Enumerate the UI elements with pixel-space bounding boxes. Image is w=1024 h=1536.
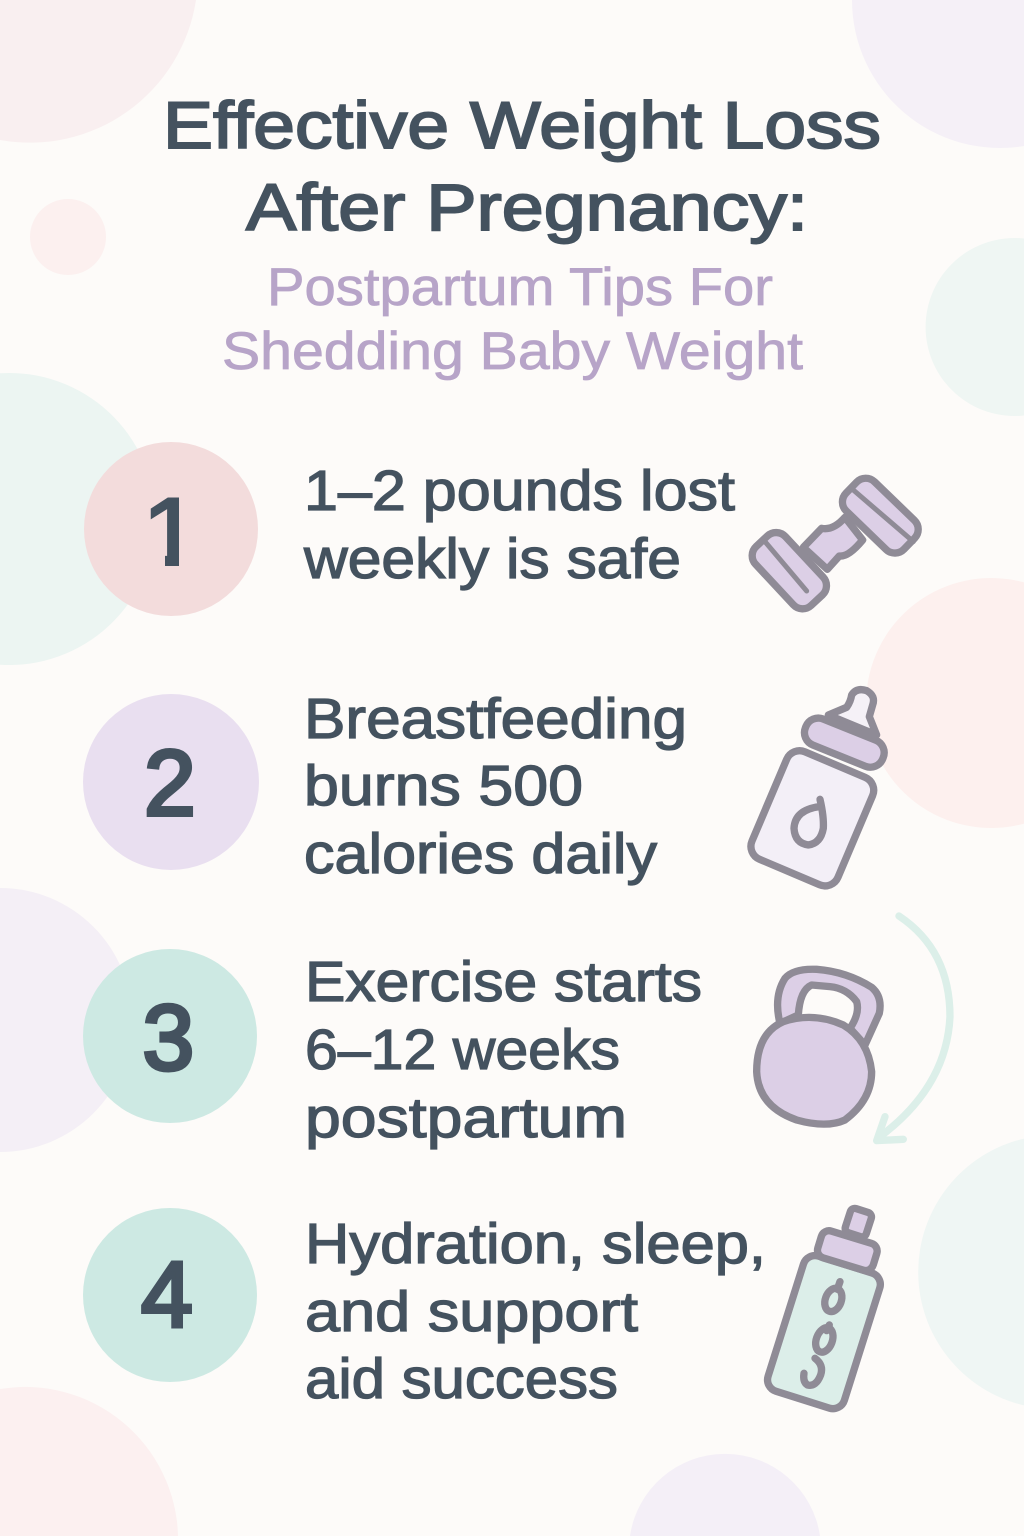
arrow [877, 916, 950, 1141]
icon: water bottle [764, 1207, 883, 1412]
tip 3 text [305, 950, 702, 1150]
number badge 3 [83, 949, 257, 1123]
icon: baby bottle [747, 690, 888, 890]
tip 3 [83, 916, 950, 1150]
number badge 2: 2 [144, 731, 196, 835]
tip 4 text [305, 1212, 766, 1411]
tip 3 text: 6–12 weeks [305, 1018, 620, 1082]
tip 1 text [303, 459, 735, 591]
title: Effective Weight Loss [163, 88, 881, 162]
tip 1 text: weekly is safe [303, 527, 681, 591]
tip 4 text: aid success [305, 1347, 618, 1411]
number badge 4 [83, 1208, 257, 1382]
icon: dumbbell [747, 473, 923, 614]
tip 3 text: postpartum [305, 1086, 627, 1150]
tip 1 text: 1–2 pounds lost [304, 459, 735, 523]
tip 2 [83, 687, 888, 890]
tip 2 text: burns 500 [304, 754, 583, 818]
number badge 1 [84, 442, 258, 616]
tip 4 [83, 1207, 883, 1412]
number badge 3: 3 [142, 986, 194, 1090]
tip 2 text [304, 687, 687, 886]
title [163, 88, 881, 244]
tip 4 text: and support [305, 1280, 638, 1344]
tip 2 text: calories daily [304, 822, 658, 886]
icon: kettlebell [757, 969, 880, 1124]
number badge 4: 4 [141, 1242, 193, 1346]
number badge 2 [83, 694, 259, 870]
tip 1 [84, 442, 923, 616]
tip 4 text: Hydration, sleep, [305, 1212, 766, 1276]
number badge 1: 1 [144, 476, 199, 587]
subtitle: Shedding Baby Weight [222, 322, 803, 381]
subtitle [222, 258, 803, 381]
tip 3 text: Exercise starts [305, 950, 702, 1014]
subtitle: Postpartum Tips For [267, 258, 773, 317]
title: After Pregnancy: [246, 170, 808, 244]
tip 2 text: Breastfeeding [304, 687, 687, 751]
